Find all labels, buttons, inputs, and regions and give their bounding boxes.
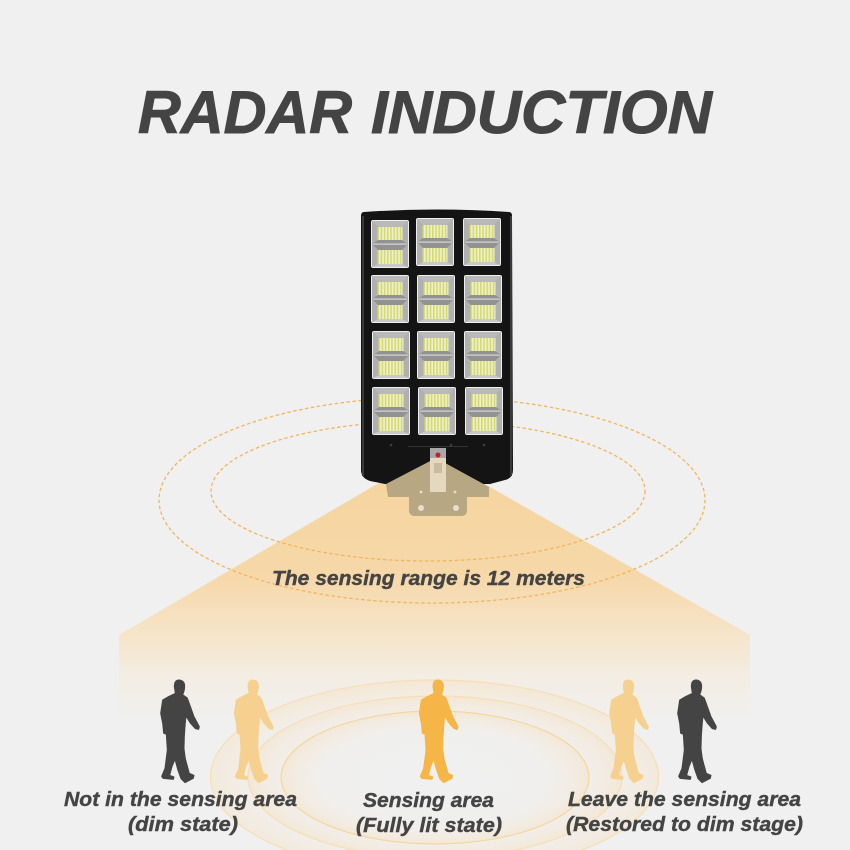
title: [138, 79, 714, 146]
caption: leave the sensing area: Leave the sensing area: [568, 789, 801, 811]
caption: not in the sensing area: Not in the sensing area: [64, 789, 297, 811]
person: in sensing area, bright: [419, 680, 458, 783]
person: entering area, light: [234, 680, 273, 783]
caption: not in the sensing area: [64, 789, 297, 836]
title: RADAR: [138, 79, 352, 146]
caption: leave the sensing area: [566, 789, 803, 836]
lamp screws: [390, 444, 485, 446]
dashed sensing range ellipses: [159, 397, 705, 603]
sensing range label: The sensing range is 12 meters: [272, 568, 585, 590]
caption: sensing area: [356, 790, 502, 837]
person: left area, dark: [678, 680, 716, 783]
caption: leave the sensing area: (Restored to dim stage): [566, 814, 803, 836]
ground rings: [210, 680, 658, 850]
lamp mounting bracket: [386, 453, 489, 516]
lamp body: [361, 210, 513, 484]
radar sensor: [430, 448, 446, 492]
caption: sensing area: Sensing area: [363, 790, 494, 812]
lamp LED modules: [371, 218, 503, 435]
solar street lamp: [361, 210, 513, 492]
person: outside area, dark: [161, 680, 199, 783]
person: leaving area, light: [610, 680, 648, 783]
sensing cone of light: [119, 453, 750, 725]
title: INDUCTION: [371, 79, 714, 146]
caption: not in the sensing area: (dim state): [128, 814, 238, 836]
caption: sensing area: (Fully lit state): [356, 815, 502, 837]
